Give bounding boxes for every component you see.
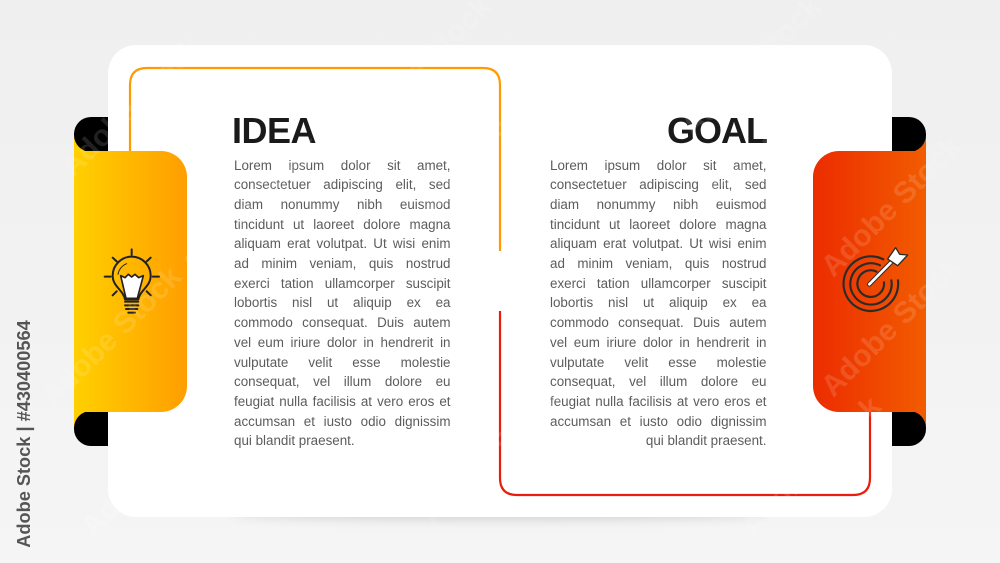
white card: [108, 45, 892, 517]
text block: goal body: [550, 158, 766, 448]
watermark: faint diagonal overlay: Adobe Stock: [415, 380, 568, 533]
watermark: faint diagonal overlay: Adobe Stock: [55, 30, 208, 183]
text block: goal body: commodo consequat. Duis autem: [550, 315, 766, 330]
watermark: faint diagonal overlay: Adobe Stock: [75, 390, 228, 543]
text block: idea body: tincidunt ut laoreet dolore magna: [234, 217, 450, 232]
text block: idea body: commodo consequat. Duis autem: [234, 315, 450, 330]
watermark: stock id: Adobe Stock | #430400564: [14, 320, 34, 548]
text block: idea body: consectetuer adipiscing elit, sed: [234, 177, 450, 192]
text block: idea body: vel eum iriure dolor in hendrerit in: [234, 335, 450, 350]
text block: idea body: consequat, vel illum dolore eu: [234, 374, 450, 389]
heading: goal: GOAL: [667, 110, 767, 151]
text block: idea body: ad minim veniam, quis nostrud: [234, 256, 450, 271]
black fold bottom left: [74, 411, 124, 446]
text block: goal body: ad minim veniam, quis nostrud: [550, 256, 766, 271]
text block: idea body: [234, 158, 450, 448]
text block: goal body: consectetuer adipiscing elit, sed: [550, 177, 766, 192]
text block: idea body: exerci tation ullamcorper suscipit: [234, 276, 450, 291]
text block: goal body: vulputate velit esse molestie: [550, 354, 766, 370]
text block: idea body: lobortis nisl ut aliquip ex ea: [234, 295, 450, 310]
text block: goal body: exerci tation ullamcorper suscipit: [550, 276, 766, 291]
text block: idea body: diam nonummy nibh euismod: [234, 197, 450, 212]
text block: goal body: Lorem ipsum dolor sit amet,: [550, 158, 766, 172]
text block: idea body: Lorem ipsum dolor sit amet,: [234, 158, 450, 172]
text block: goal body: qui blandit praesent.: [646, 433, 766, 448]
text block: goal body: feugiat nulla facilisis at vero eros et: [550, 394, 766, 409]
watermark: faint diagonal overlay: Adobe Stock: [815, 130, 968, 283]
text block: goal body: consequat, vel illum dolore eu: [550, 374, 766, 389]
text block: idea body: accumsan et iusto odio dignissim: [234, 414, 450, 429]
idea fold underlay: [74, 135, 104, 428]
text block: idea body: vulputate velit esse molestie: [234, 354, 450, 370]
black fold bottom right: [876, 411, 926, 446]
black fold top left: [74, 117, 124, 152]
heading: idea: IDEA: [232, 110, 316, 151]
text block: idea body: qui blandit praesent.: [234, 433, 355, 448]
watermark: faint diagonal overlay: Adobe Stock: [735, 390, 888, 543]
text block: goal body: lobortis nisl ut aliquip ex ea: [550, 295, 766, 310]
goal fold underlay: [896, 135, 926, 428]
text block: goal body: accumsan et iusto odio dignissim: [550, 414, 766, 429]
panel: idea tab: [74, 151, 187, 412]
text block: goal body: vel eum iriure dolor in hendrerit in: [550, 335, 766, 350]
watermark: faint diagonal overlay: Adobe Stock: [35, 260, 188, 413]
text block: idea body: feugiat nulla facilisis at vero eros et: [234, 394, 450, 409]
icon: light bulb: [104, 248, 160, 314]
icon: target with dart: [842, 247, 908, 312]
watermark: faint diagonal overlay: Adobe Stock: [815, 250, 968, 403]
black fold top right: [876, 117, 926, 152]
watermark: faint diagonal overlay: Adobe Stock: [415, 70, 568, 223]
text block: goal body: tincidunt ut laoreet dolore magna: [550, 217, 766, 232]
card shadow: [230, 506, 770, 518]
watermark: faint diagonal overlay: Adobe Stock: [175, 130, 328, 283]
panel: goal tab: [813, 151, 926, 412]
text block: goal body: aliquam erat volutpat. Ut wisi enim: [550, 236, 766, 251]
text block: goal body: diam nonummy nibh euismod: [550, 197, 766, 212]
text block: idea body: aliquam erat volutpat. Ut wisi enim: [234, 236, 450, 251]
watermark: faint diagonal overlay: Adobe Stock: [675, 70, 828, 223]
